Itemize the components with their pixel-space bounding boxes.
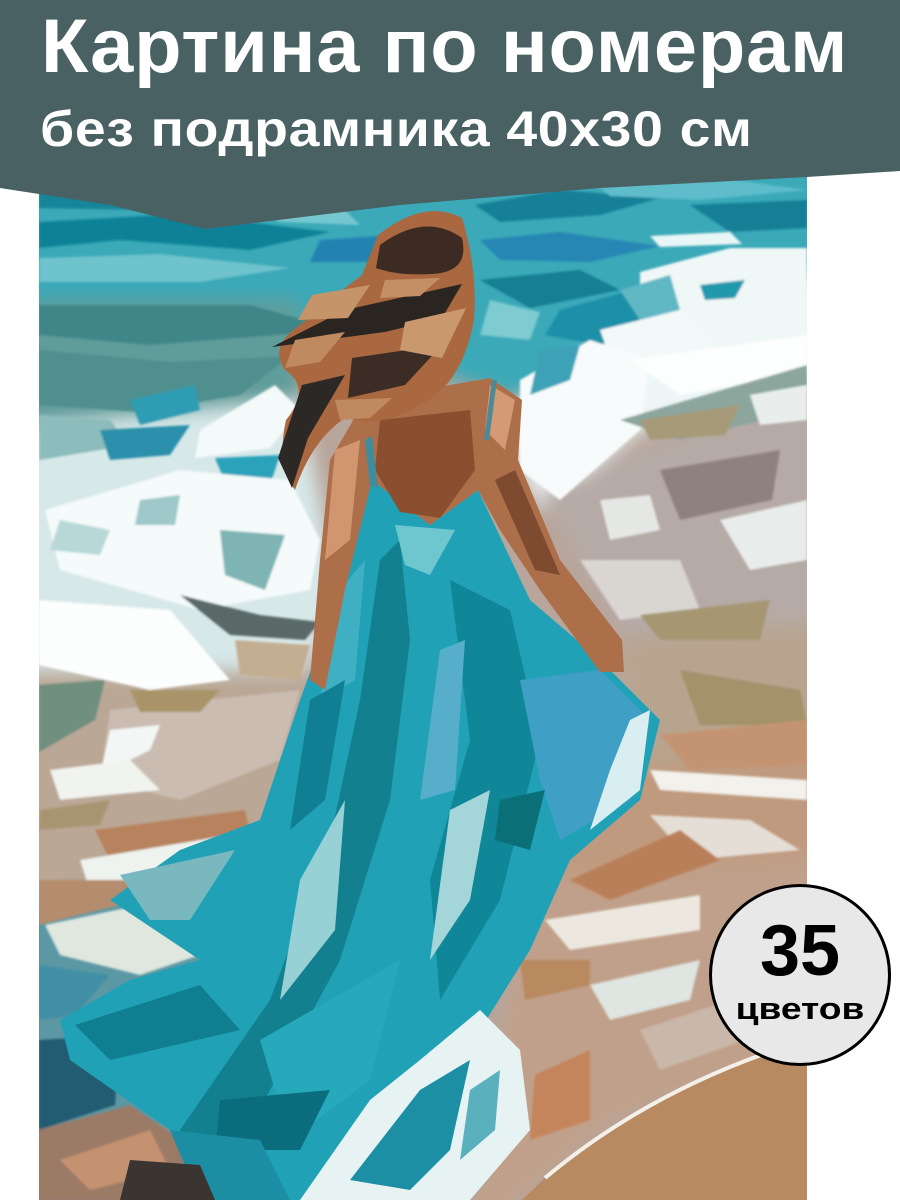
subtitle: без подрамника 40х30 см [40, 101, 753, 157]
dress [60, 480, 660, 1200]
sea and beach background [39, 177, 807, 1200]
hair [272, 211, 475, 490]
badge: 35 colours: цветов [736, 991, 864, 1026]
header banner [0, 0, 900, 229]
badge: 35 colours: 35 [760, 911, 840, 991]
woman: arms and back [310, 378, 624, 690]
badge: 35 colours [709, 884, 891, 1066]
title: Картина по номерам [41, 4, 848, 89]
foam at hem [300, 1010, 530, 1200]
